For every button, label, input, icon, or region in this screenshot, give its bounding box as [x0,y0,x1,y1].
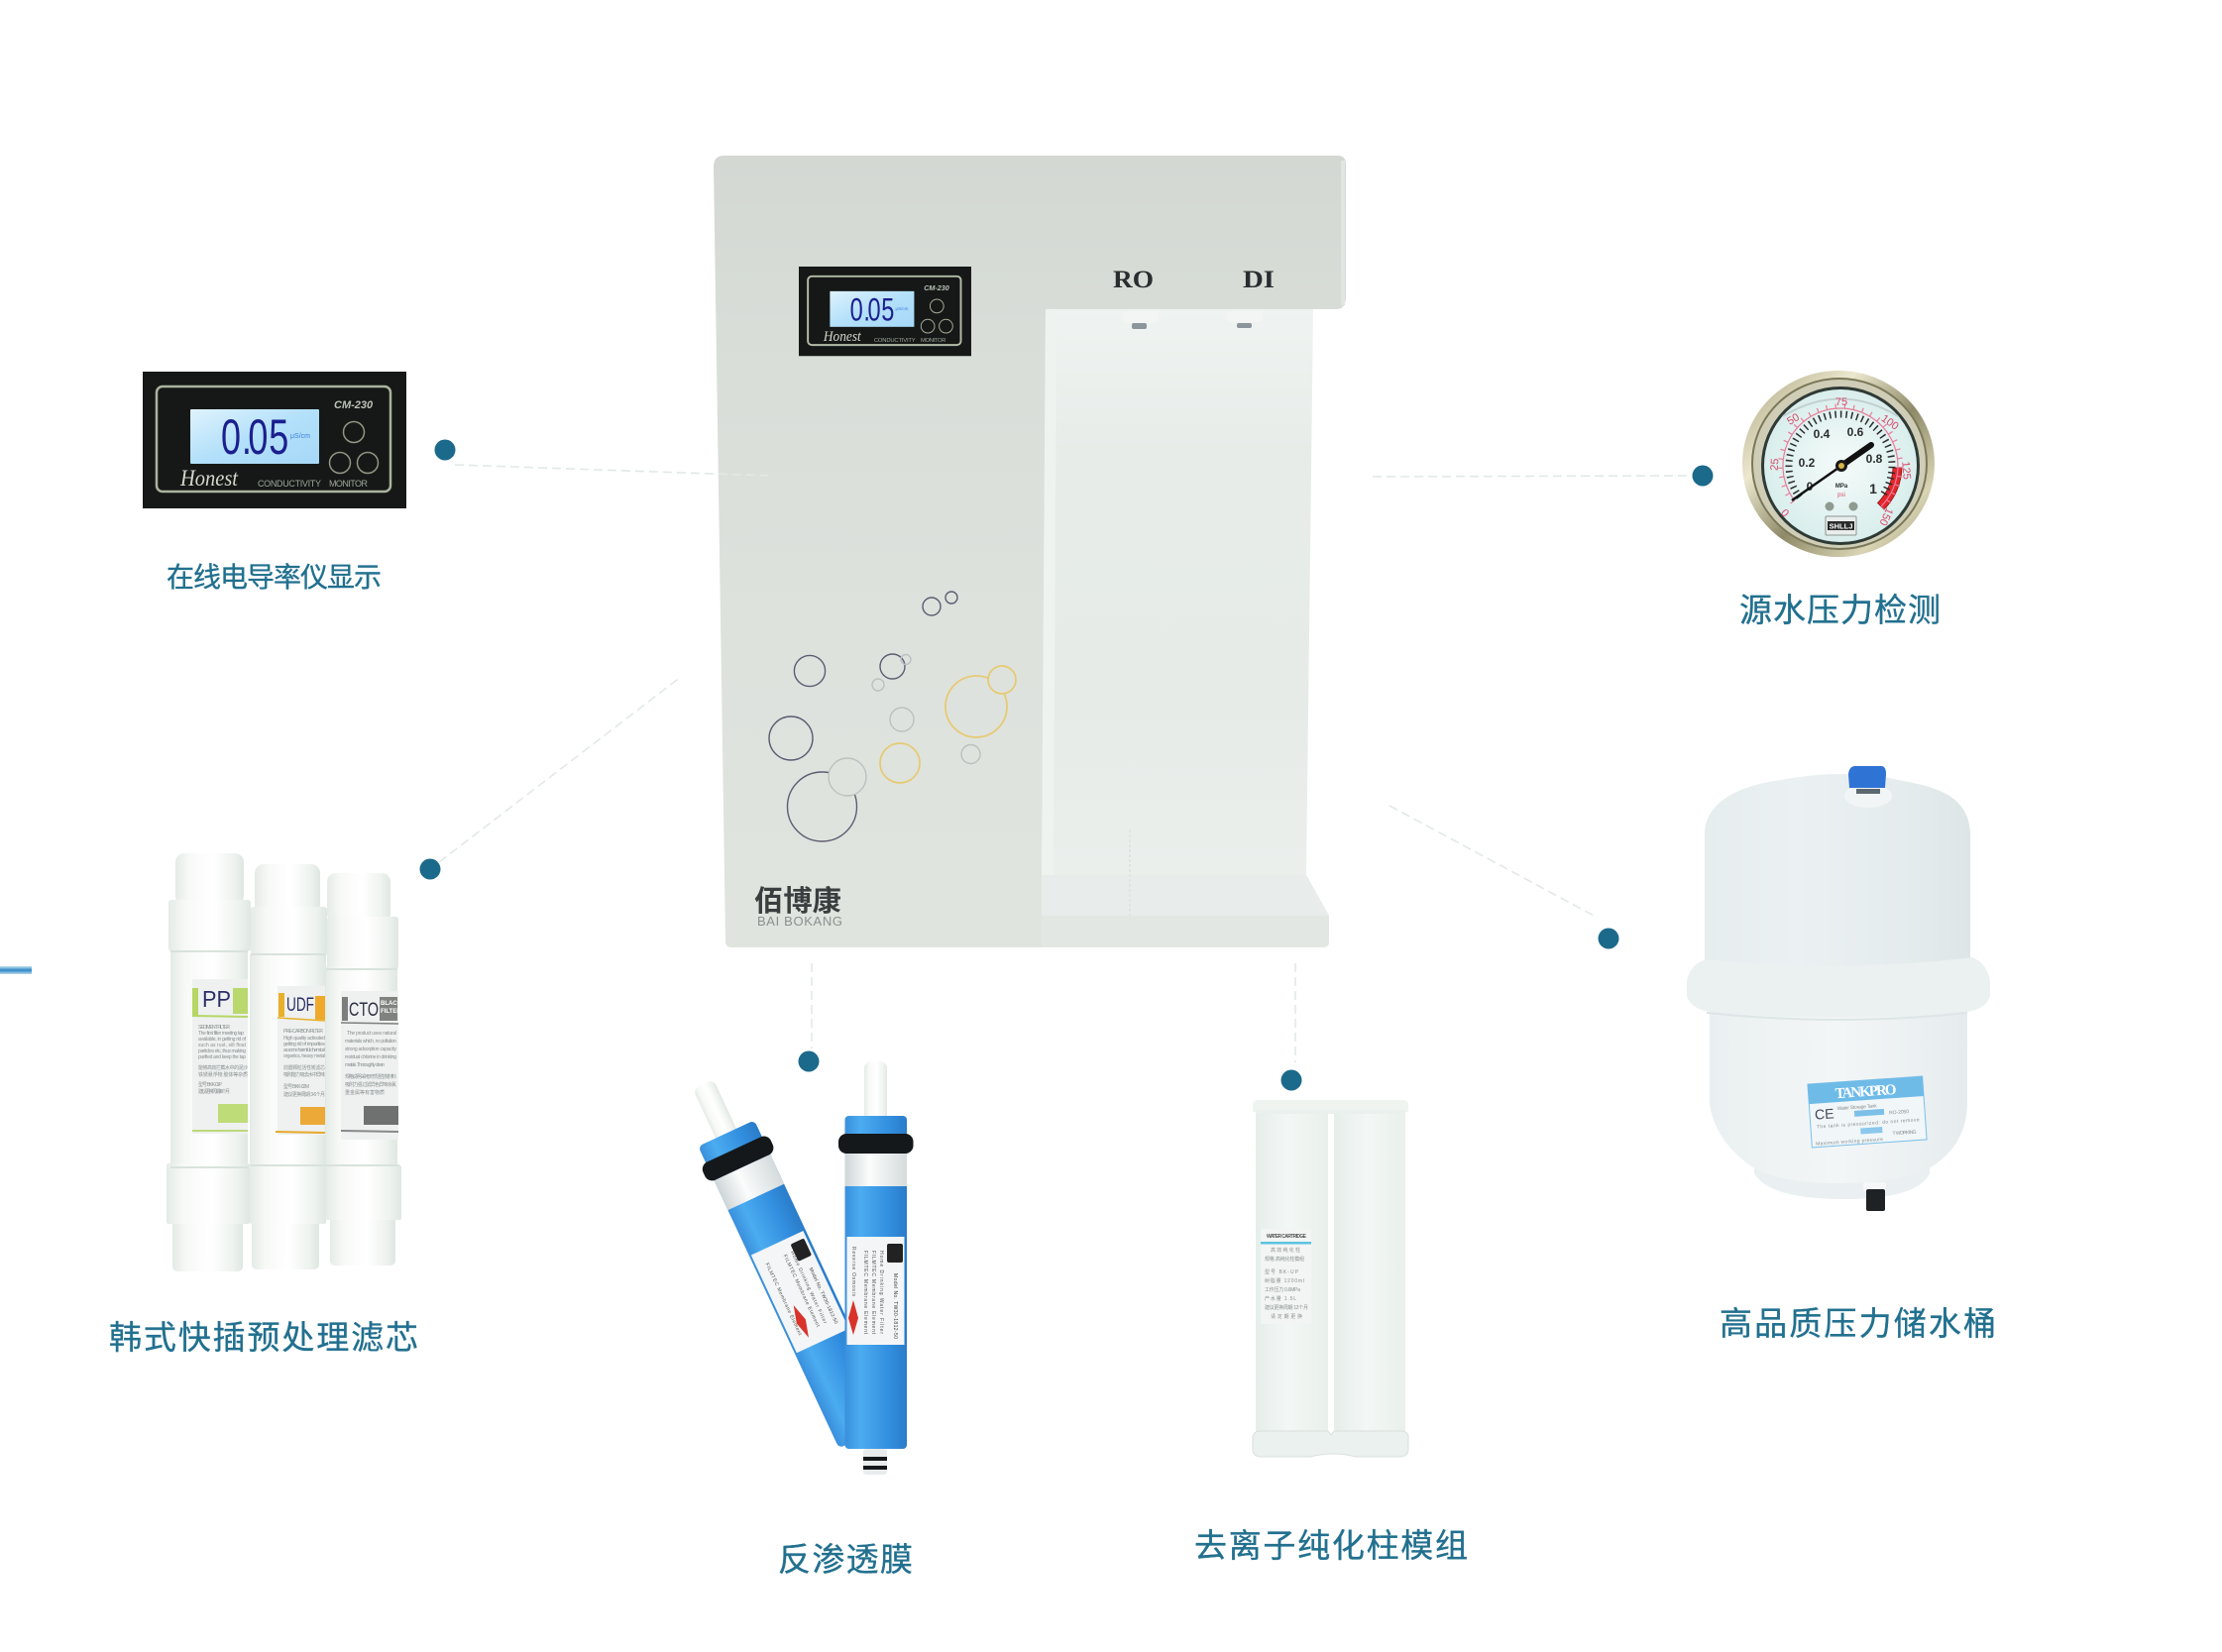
UDF label: 吸附能力 吸去水中异味 [283,1071,325,1078]
tank label: Maximum working pressure [1816,1137,1883,1148]
PP label: 型号 BKK-01P [198,1081,223,1088]
recess left edge highlight [1042,309,1056,875]
main unit: water purifier [714,156,1346,947]
conductivity meter display: μS/cm [290,433,310,440]
membrane label: Home Drinking Water Filter [878,1251,884,1334]
membrane label: FILMTEC Membrane Element [862,1251,868,1335]
CTO label: The product uses natural [347,1031,396,1037]
CTO label: 吸附力强 过滤异色异味余氯 [345,1081,396,1088]
panel: deionization module [1194,1070,1468,1564]
UDF label: PRE-CARBON FILTER [283,1029,323,1035]
filter: PP [167,853,251,1271]
tank label: The tank is pressurized: do not remove [1817,1117,1920,1131]
PP label: PP [202,986,231,1012]
tank label: RO-2050 [1889,1109,1910,1116]
leader line: DI module [1294,963,1296,1062]
filter: UDF [250,864,327,1269]
CTO label: strong adsorption capacity [345,1046,396,1052]
panel: pressure gauge [1693,371,1941,628]
CTO label [341,991,402,1140]
conductivity display on unit: Honest [823,329,862,345]
bottom connector [863,1449,887,1475]
valve cap [1844,766,1892,808]
UDF label: 建议更换周期 3-6个月 [283,1091,325,1098]
base shelf [1042,875,1329,916]
cartridge label: 规格 高纯化柱模组 [1265,1256,1304,1263]
leader line: pretreatment filters [439,677,681,862]
base front [1042,916,1329,947]
PP label: The first filter meeting tap [198,1031,244,1037]
label: 韩式快插预处理滤芯 [109,1319,418,1356]
filter: CTO [325,873,402,1266]
gauge dial: 0.4 [1814,427,1831,441]
UDF label: organics, heavy metal [283,1053,325,1059]
CTO label: 规格说明 采用天然活性炭材料 [345,1073,396,1080]
tilted membrane: FILMTEC Membrane Element [764,1263,803,1337]
gauge dial: 75 [1835,396,1847,408]
brand logo: BAI BOKANG [757,914,842,929]
upright membrane [838,1061,914,1475]
conductivity meter display: MONITOR [329,479,369,489]
membrane label: Model No. TW30-1812-50 [892,1273,898,1339]
UDF label: 型号 BKK-02M [283,1083,309,1090]
cartridge label [1261,1229,1311,1324]
CTO label: 重金属等有害物质 [345,1089,385,1096]
DI outlet label: DI [1243,267,1275,293]
label: 去离子纯化柱模组 [1194,1527,1468,1564]
tilted membrane: FILMTEC Membrane Element [782,1254,821,1329]
accent stroke at left edge [0,966,32,974]
conductivity meter display: 0.05 [221,410,288,465]
CTO label: residual chlorine in drinking [345,1054,396,1060]
module body [1253,1100,1408,1457]
cartridge label: 工作压力 0.6MPa [1265,1286,1300,1293]
callout dot [1598,928,1619,949]
tank label [1808,1076,1927,1148]
conductivity display on unit: CM-230 [924,283,949,292]
decorative bubbles [769,592,1016,841]
gauge dial: 0.8 [1866,452,1883,466]
tank fitting [1863,1182,1886,1211]
right housing edge [1341,161,1345,305]
gauge dial [1742,371,1935,557]
panel: RO membrane [669,1050,914,1578]
CTO label: materials which, no pollution [345,1039,396,1045]
membrane label: FILMTEC Membrane Element [870,1251,876,1335]
CTO label: CTO [349,1000,379,1021]
cartridge label: 请定期更换 [1271,1313,1302,1320]
callout dot [1693,466,1713,486]
conductivity display on unit: MONITOR [921,338,945,344]
label: 在线电导率仪显示 [167,562,382,593]
gauge dial: 0 [1779,506,1792,518]
cartridge label: 产水量 1.5L [1265,1295,1296,1302]
tank label: CE [1815,1105,1834,1123]
RO nozzle [1123,311,1159,329]
UDF label: High quality activated [283,1036,325,1042]
cartridge label: 建议更换周期 12个月 [1265,1304,1308,1311]
gauge dial: 0 [1807,480,1814,494]
label: 反渗透膜 [778,1541,913,1578]
PP label: 铁锈悬浮物 胶体等杂质 [198,1071,248,1078]
leader line: RO membrane [811,963,813,1048]
PP label: particles etc, thus making [198,1048,246,1054]
UDF label: 前置颗粒活性炭滤芯 [283,1064,325,1071]
CTO label: metals. Thoroughly clean [345,1062,385,1068]
brand logo: 佰博康 [754,885,841,918]
PP label: purified and keep the tap [198,1054,246,1060]
cartridge label: 树脂量 1200ml [1265,1277,1304,1284]
conductivity meter display: CM-230 [334,399,374,411]
PP label: 建议更换周期 3-6个月 [198,1088,230,1095]
label: 源水压力检测 [1739,592,1941,628]
conductivity display on unit: μS/cm [895,306,909,311]
tank label: TANKPRO [1834,1082,1897,1102]
PP label: SEDIMENT FILTER [198,1025,230,1031]
tank label: Water Storage Tank [1837,1103,1877,1112]
conductivity display on unit [799,267,971,356]
CTO label: FILTER [381,1009,401,1015]
UDF label [276,986,325,1135]
UDF label: UDF [286,995,314,1016]
tank label: T WORKING [1892,1130,1917,1137]
machine housing [714,156,1346,947]
UDF label: as some harmful chemical [283,1047,325,1053]
callout dot [420,858,440,880]
RO outlet label: RO [1113,267,1154,293]
gauge dial: 50 [1785,411,1802,428]
panel: pretreatment filters [109,853,440,1356]
leader line: conductivity [455,465,768,476]
leader line: storage tank [1389,806,1598,918]
gauge dial: SHLLJ [1830,521,1852,531]
PP label: available, in getting rid of [198,1037,247,1043]
label: 高品质压力储水桶 [1720,1305,1996,1342]
gauge dial: 0.2 [1799,456,1816,470]
leader line: pressure gauge [1373,476,1687,477]
gauge dial: MPa [1835,484,1848,490]
gauge dial: 100 [1879,412,1901,433]
panel: conductivity meter [143,372,456,593]
tilted membrane [669,1068,901,1451]
membrane label: Reverse Osmosis [850,1247,856,1296]
PP label [192,979,248,1134]
tank vessel [1687,774,1990,1199]
CTO label: BLACK [381,1001,402,1007]
tilted membrane: Home Drinking Water Filter [789,1251,828,1325]
water recess [1042,309,1313,875]
callout dot [1280,1070,1302,1090]
membrane label [846,1237,904,1345]
conductivity display on unit: 0.05 [850,292,894,328]
DI nozzle [1227,311,1263,328]
PP label: 能够高效拦截水中的泥沙 [198,1064,248,1071]
UDF label: getting rid of impurities [283,1042,325,1047]
gauge dial: 25 [1769,458,1782,471]
conductivity meter display: Honest [179,466,239,491]
cartridge label: 型号 BK-UP [1265,1268,1299,1275]
callout dot [434,440,456,460]
tilted membrane: Model No. TW30-1812-50 [808,1267,838,1325]
gauge dial: psi [1837,493,1845,498]
panel: storage tank [1598,766,1996,1342]
conductivity meter display [143,372,406,508]
cartridge label: 高效纯化柱 [1271,1247,1300,1254]
cartridge label: WATER CARTRIDGE [1267,1234,1307,1240]
gauge dial: 150 [1876,505,1895,527]
gauge dial: 0.6 [1847,425,1864,439]
gauge dial: 1 [1869,481,1877,496]
PP label: such as rust, silt float [198,1043,247,1048]
callout dot [799,1050,819,1072]
conductivity meter display: CONDUCTIVITY [258,479,321,489]
conductivity display on unit: CONDUCTIVITY [874,338,916,344]
gauge dial: 125 [1899,461,1913,480]
